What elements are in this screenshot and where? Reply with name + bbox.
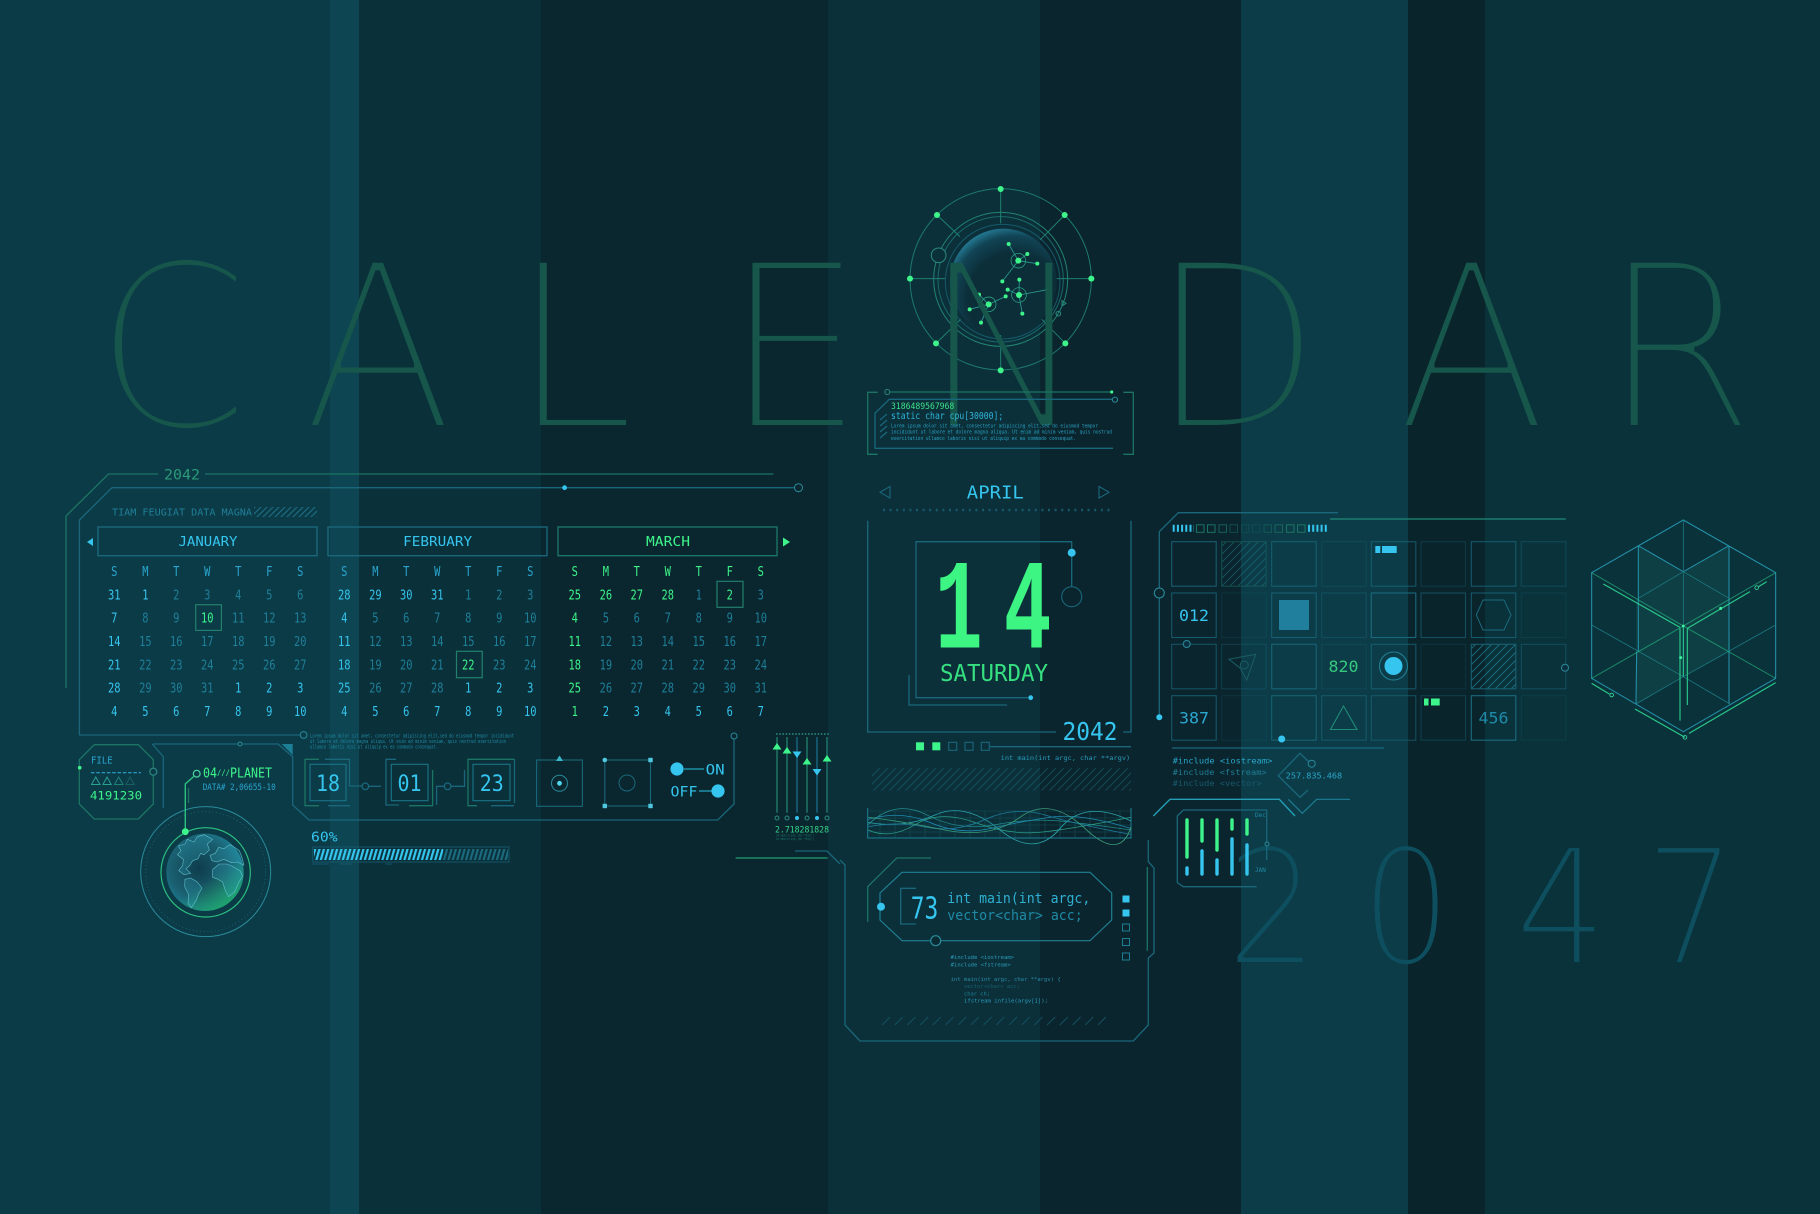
calendar January grid: 8 [142, 610, 148, 626]
calendar March grid: 4 [665, 704, 671, 719]
calendar March grid: 24 [754, 657, 767, 673]
calendar March grid: 15 [693, 634, 705, 649]
panel: file badge [78, 745, 157, 819]
calendar March grid: 19 [600, 657, 612, 673]
bottom hatch [882, 1017, 1106, 1025]
calendar January grid: 25 [232, 657, 245, 673]
sliders: 2.718281828 [775, 826, 829, 836]
calendar February grid: 10 [524, 704, 537, 719]
calendar February grid: 3 [527, 680, 533, 696]
calendar February grid: 20 [400, 657, 413, 673]
calendar February grid: 30 [400, 587, 413, 603]
icon: globe [141, 807, 271, 937]
calendar January grid: 3 [297, 680, 303, 696]
wave chart [868, 808, 1131, 845]
month title: APRIL [967, 482, 1024, 504]
calendar January grid: 3 [204, 587, 210, 603]
notch line [1288, 799, 1350, 813]
calendar March grid: 27 [631, 680, 643, 696]
signature text: int main(int argc, char **argv) [1001, 755, 1130, 762]
planet label: /// [217, 768, 230, 778]
icon: wireframe cube [1592, 520, 1776, 739]
subtitle: TIAM FEUGIAT DATA MAGNA [112, 508, 252, 518]
calendar January grid: 5 [266, 587, 272, 603]
calendar January grid: 7 [111, 610, 117, 626]
calendar February grid: 11 [338, 634, 351, 649]
calendar February grid: 6 [403, 704, 409, 719]
diamond readout [1278, 753, 1342, 797]
diamond readout: 257.835.468 [1286, 772, 1342, 780]
code listing: char ch; [964, 991, 990, 997]
calendar March grid: 30 [724, 680, 736, 696]
hatch band [872, 768, 1131, 791]
calendar February grid: 6 [403, 610, 409, 626]
calendar February grid: 26 [369, 680, 382, 696]
calendar January grid: F [266, 564, 272, 579]
toggle on [670, 762, 725, 778]
calendar January grid: 10 [294, 704, 307, 719]
calendar February grid: 4 [341, 610, 347, 626]
calendar January grid: 12 [263, 610, 276, 626]
value 012: 012 [1179, 606, 1209, 625]
code listing: #include <iostream> [951, 955, 1014, 961]
calendar January grid: 31 [108, 587, 121, 603]
calendar February grid: F [496, 564, 502, 579]
calendar March grid: 13 [631, 634, 643, 649]
calendar March grid: 7 [665, 610, 671, 626]
calendar January grid: 11 [232, 610, 245, 626]
calendar March grid: 20 [631, 657, 643, 673]
calendar February grid: 28 [338, 587, 351, 603]
calendar March grid: 26 [600, 587, 612, 603]
panel: data grid [1154, 513, 1568, 797]
counter 23: 23 [480, 771, 504, 797]
calendar February grid: 7 [434, 704, 440, 719]
month arrows [87, 538, 790, 546]
connector node [437, 770, 464, 805]
corner accent lines [868, 858, 1147, 951]
row 2 cells [1172, 593, 1566, 638]
panel: three month calendar [66, 468, 802, 750]
calendar February grid: 5 [372, 704, 378, 719]
big title CALENDAR: CALENDAR [94, 216, 1757, 482]
calendar March grid: 8 [696, 610, 702, 626]
sliders: int main(int argc, char **argv) { [776, 834, 814, 838]
hexagon icon [1476, 600, 1511, 630]
planet label: DATA# 2,06655-10 [203, 783, 276, 793]
calendar February grid: 2 [496, 587, 502, 603]
panel: file badge: 4191230 [90, 788, 142, 802]
lorem caption [310, 734, 514, 750]
code info panel under radar [868, 390, 1133, 454]
calendar January grid: 6 [173, 704, 179, 719]
counter 18 [305, 759, 362, 806]
cyan bars [1187, 839, 1247, 874]
calendar January grid: 23 [170, 657, 183, 673]
code info panel under radar: 3186489567968 [891, 402, 954, 412]
calendar March grid: 9 [727, 610, 733, 626]
code listing [951, 955, 1061, 1005]
calendar January grid: 5 [142, 704, 148, 719]
panel: bar chart [1153, 799, 1350, 887]
calendar January grid: 27 [294, 657, 307, 673]
chart labels: Dec [1255, 812, 1266, 819]
calendar January grid: 16 [170, 634, 183, 649]
panel: code card [840, 840, 1154, 1041]
connector node [362, 783, 381, 790]
calendar January grid: 13 [294, 610, 307, 626]
calendar March grid: F [727, 564, 733, 579]
triangle icon [1330, 706, 1357, 730]
calendar March grid: 11 [569, 634, 581, 649]
calendar March grid: 26 [600, 680, 612, 696]
green bars [1424, 698, 1440, 706]
calendar January grid: 15 [139, 634, 152, 649]
calendar March grid: T [696, 564, 702, 579]
target widget [537, 756, 582, 806]
green bars [1187, 820, 1247, 857]
calendar January grid: W [204, 564, 211, 579]
month header January [98, 527, 317, 556]
calendar March grid: 1 [572, 704, 578, 719]
calendar January grid [108, 564, 307, 719]
calendar March grid: 5 [603, 610, 609, 626]
calendar February grid: T [403, 564, 409, 579]
calendar January grid: S [297, 564, 303, 579]
year label: 2042 [164, 468, 200, 484]
node circles [1183, 640, 1568, 671]
calendar February grid: 14 [431, 634, 444, 649]
code headline: vector<char> acc; [947, 908, 1083, 924]
chart frame [1177, 810, 1267, 887]
calendar March grid: 14 [662, 634, 674, 649]
counter 01 [386, 759, 433, 806]
month header March [558, 527, 777, 556]
calendar February grid: 16 [493, 634, 506, 649]
calendar January grid: 31 [201, 680, 214, 696]
filled square [1279, 600, 1309, 630]
calendar February grid: 24 [524, 657, 537, 673]
calendar January grid: 7 [204, 704, 210, 719]
radar constellation icon [907, 186, 1094, 373]
calendar March grid: 10 [754, 610, 767, 626]
calendar February grid: 13 [400, 634, 413, 649]
bar chart brackets [1153, 799, 1295, 816]
big year 2047: 2047 [1227, 816, 1736, 1001]
calendar February grid: 1 [465, 587, 471, 603]
calendar January grid: 2 [173, 587, 179, 603]
code headline [947, 891, 1090, 924]
calendar February grid: 5 [372, 610, 378, 626]
planet label: 04 [203, 766, 219, 782]
calendar January grid: 26 [263, 657, 276, 673]
calendar March grid: 5 [696, 704, 702, 719]
status strip [1173, 525, 1329, 532]
counter 18: 18 [316, 771, 340, 797]
calendar February grid: 9 [496, 704, 502, 719]
value 820: 820 [1328, 657, 1358, 676]
counter 23 [468, 759, 514, 806]
calendar March grid: 22 [693, 657, 705, 673]
code listing: ifstream infile(argv[1]); [964, 999, 1048, 1005]
month header February: FEBRUARY [403, 534, 472, 550]
calendar February grid: 27 [400, 680, 413, 696]
calendar January grid: 9 [173, 610, 179, 626]
calendar January grid: 2 [266, 680, 272, 696]
calendar January grid: 8 [235, 704, 241, 719]
value 387: 387 [1179, 708, 1209, 728]
calendar March grid: 2 [603, 704, 609, 719]
octagon nodes [877, 903, 941, 946]
calendar March grid: 31 [754, 680, 767, 696]
value 456: 456 [1478, 708, 1508, 728]
row 1 cells [1172, 542, 1566, 586]
row 4 cells [1172, 696, 1566, 740]
calendar March grid: 23 [724, 657, 736, 673]
toggle off: OFF [670, 784, 698, 800]
target dot [1380, 652, 1408, 680]
calendar February grid: 25 [338, 680, 351, 696]
calendar March grid: 4 [572, 610, 578, 626]
calendar January grid: 18 [232, 634, 245, 649]
planet label [182, 766, 276, 835]
calendar February grid: 19 [369, 657, 382, 673]
grid frame lines [1154, 513, 1566, 748]
include list: #include <vector> [1173, 779, 1262, 788]
month header March: MARCH [646, 534, 690, 550]
calendar March grid: T [634, 564, 640, 579]
calendar March grid: 25 [569, 680, 581, 696]
toggle off [670, 784, 725, 800]
lorem caption: ut labore et dolore magna aliqua. Ut enim ad minim veniam, quis nostrud exercitation [310, 739, 506, 745]
calendar January grid: 1 [235, 680, 241, 696]
calendar March grid: 18 [569, 657, 581, 673]
arrow star icon [1229, 654, 1256, 680]
calendar February grid: W [434, 564, 441, 579]
calendar February grid: 1 [465, 680, 471, 696]
code info panel under radar: static char cpu[30000]; [891, 411, 1003, 422]
calendar January grid: T [235, 564, 241, 579]
calendar January grid: 28 [108, 680, 121, 696]
calendar January grid: 24 [201, 657, 214, 673]
code listing: #include <fstream> [951, 962, 1011, 968]
code title octagon [880, 872, 1112, 941]
sliders [772, 734, 832, 841]
calendar March grid: 17 [754, 634, 767, 649]
pager squares [916, 742, 1131, 750]
panel: file badge: FILE [91, 756, 113, 766]
calendar January grid: 4 [235, 587, 241, 603]
calendar March grid: 12 [600, 634, 612, 649]
calendar March grid: 3 [634, 704, 640, 719]
calendar February grid: 22 [462, 657, 475, 673]
panel: controls frame [152, 733, 737, 820]
calendar February grid: 15 [462, 634, 475, 649]
calendar January grid: 20 [294, 634, 307, 649]
chart labels [1255, 812, 1266, 874]
chart labels: JAN [1255, 867, 1266, 874]
calendar February grid: 28 [431, 680, 444, 696]
inner frame [909, 542, 1082, 705]
calendar March grid: 16 [724, 634, 736, 649]
code info panel under radar: exercitation ullamco laboris nisi ut aliquip ex ea commodo consequat. [891, 436, 1076, 442]
calendar February grid: M [372, 564, 378, 579]
include list: #include <iostream> [1173, 756, 1273, 766]
calendar March grid: M [603, 564, 609, 579]
calendar February grid: 21 [431, 657, 444, 673]
calendar March grid: 2 [727, 587, 733, 603]
marker dot [1278, 736, 1285, 742]
calendar February grid: 8 [465, 704, 471, 719]
calendar February grid: 17 [524, 634, 537, 649]
code info panel under radar: Lorem ipsum dolor sit amet, consectetur adipiscing elit,sed do eiusmod tempor [891, 424, 1098, 430]
calendar January grid: S [111, 564, 117, 579]
planet label: PLANET [230, 766, 272, 782]
toggle on: ON [706, 762, 725, 778]
month header February [328, 527, 547, 556]
subtitle hatch [254, 507, 317, 517]
bar icon [1375, 546, 1397, 553]
calendar March grid: 29 [693, 680, 705, 696]
calendar March grid: 6 [634, 610, 640, 626]
calendar March grid: S [572, 564, 578, 579]
calendar January grid: 6 [297, 587, 303, 603]
frame lines [66, 474, 802, 738]
counter 73: 73 [911, 892, 938, 926]
lorem caption: Lorem ipsum dolor sit amet, consectetur adipiscing elit,sed do eiusmod tempor incididunt [310, 734, 514, 740]
calendar February grid: 23 [493, 657, 506, 673]
calendar March grid: 25 [569, 587, 581, 603]
calendar February grid: 4 [341, 704, 347, 719]
progress bar 60%: 60% [311, 830, 338, 846]
calendar February grid [338, 564, 537, 719]
code listing: vector<char> acc; [964, 984, 1020, 990]
calendar March grid: S [758, 564, 764, 579]
calendar January grid: 19 [263, 634, 276, 649]
calendar March grid: 7 [758, 704, 764, 719]
prev next arrows [880, 486, 1109, 498]
card frame [868, 521, 1131, 732]
calendar January grid: 9 [266, 704, 272, 719]
calendar February grid: T [465, 564, 471, 579]
row 3 cells [1172, 644, 1566, 689]
calendar January grid: 10 [201, 610, 214, 626]
panel: April day card [868, 482, 1131, 845]
calendar February grid: 8 [465, 610, 471, 626]
counter 01: 01 [398, 771, 422, 797]
calendar January grid: 29 [139, 680, 152, 696]
calendar March grid: 27 [631, 587, 643, 603]
calendar February grid: 3 [527, 587, 533, 603]
calendar February grid: 7 [434, 610, 440, 626]
calendar January grid: 4 [111, 704, 117, 719]
calendar February grid: 12 [369, 634, 382, 649]
code info panel under radar: incididunt ut labore et dolore magna aliqua. Ut enim ad minim veniam, quis nostrud [891, 430, 1112, 436]
side squares [1122, 896, 1130, 960]
calendar March grid: 1 [696, 587, 702, 603]
dashed hatch [883, 509, 1113, 511]
calendar February grid: 18 [338, 657, 351, 673]
calendar January grid: 21 [108, 657, 121, 673]
calendar January grid: 22 [139, 657, 152, 673]
calendar March grid: 21 [662, 657, 674, 673]
calendar February grid: 10 [524, 610, 537, 626]
lorem caption: ullamco laboris nisi ut aliquip ex ea commodo consequat. [310, 744, 438, 750]
sliders: int main(int argc, char **argv) { [776, 837, 814, 841]
calendar February grid: S [527, 564, 533, 579]
include list [1173, 756, 1273, 788]
weekday: SATURDAY [940, 661, 1048, 687]
calendar March grid: W [665, 564, 672, 579]
calendar March grid: 28 [662, 680, 674, 696]
counter 73 [901, 888, 938, 926]
calendar January grid: 17 [201, 634, 214, 649]
code listing: int main(int argc, char **argv) { [951, 977, 1061, 983]
year: 2042 [1062, 717, 1118, 746]
include list: #include <fstream> [1173, 768, 1267, 777]
calendar January grid: 30 [170, 680, 183, 696]
calendar February grid: 29 [369, 587, 382, 603]
calendar January grid: T [173, 564, 179, 579]
link lines into code panel [736, 851, 840, 864]
calendar February grid: 2 [496, 680, 502, 696]
calendar January grid: 14 [108, 634, 121, 649]
calendar February grid: S [341, 564, 347, 579]
selection widget [602, 758, 653, 808]
progress bar 60% [311, 830, 509, 864]
calendar March grid [569, 564, 767, 719]
calendar February grid: 9 [496, 610, 502, 626]
calendar January grid: M [142, 564, 148, 579]
date highlight boxes [196, 581, 743, 678]
calendar March grid: 28 [662, 587, 674, 603]
code headline: int main(int argc, [947, 891, 1090, 907]
calendar March grid: 3 [758, 587, 764, 603]
month header January: JANUARY [178, 534, 238, 550]
calendar January grid: 1 [142, 587, 148, 603]
day number 14: 14 [935, 541, 1051, 686]
calendar February grid: 31 [431, 587, 444, 603]
calendar March grid: 6 [727, 704, 733, 719]
